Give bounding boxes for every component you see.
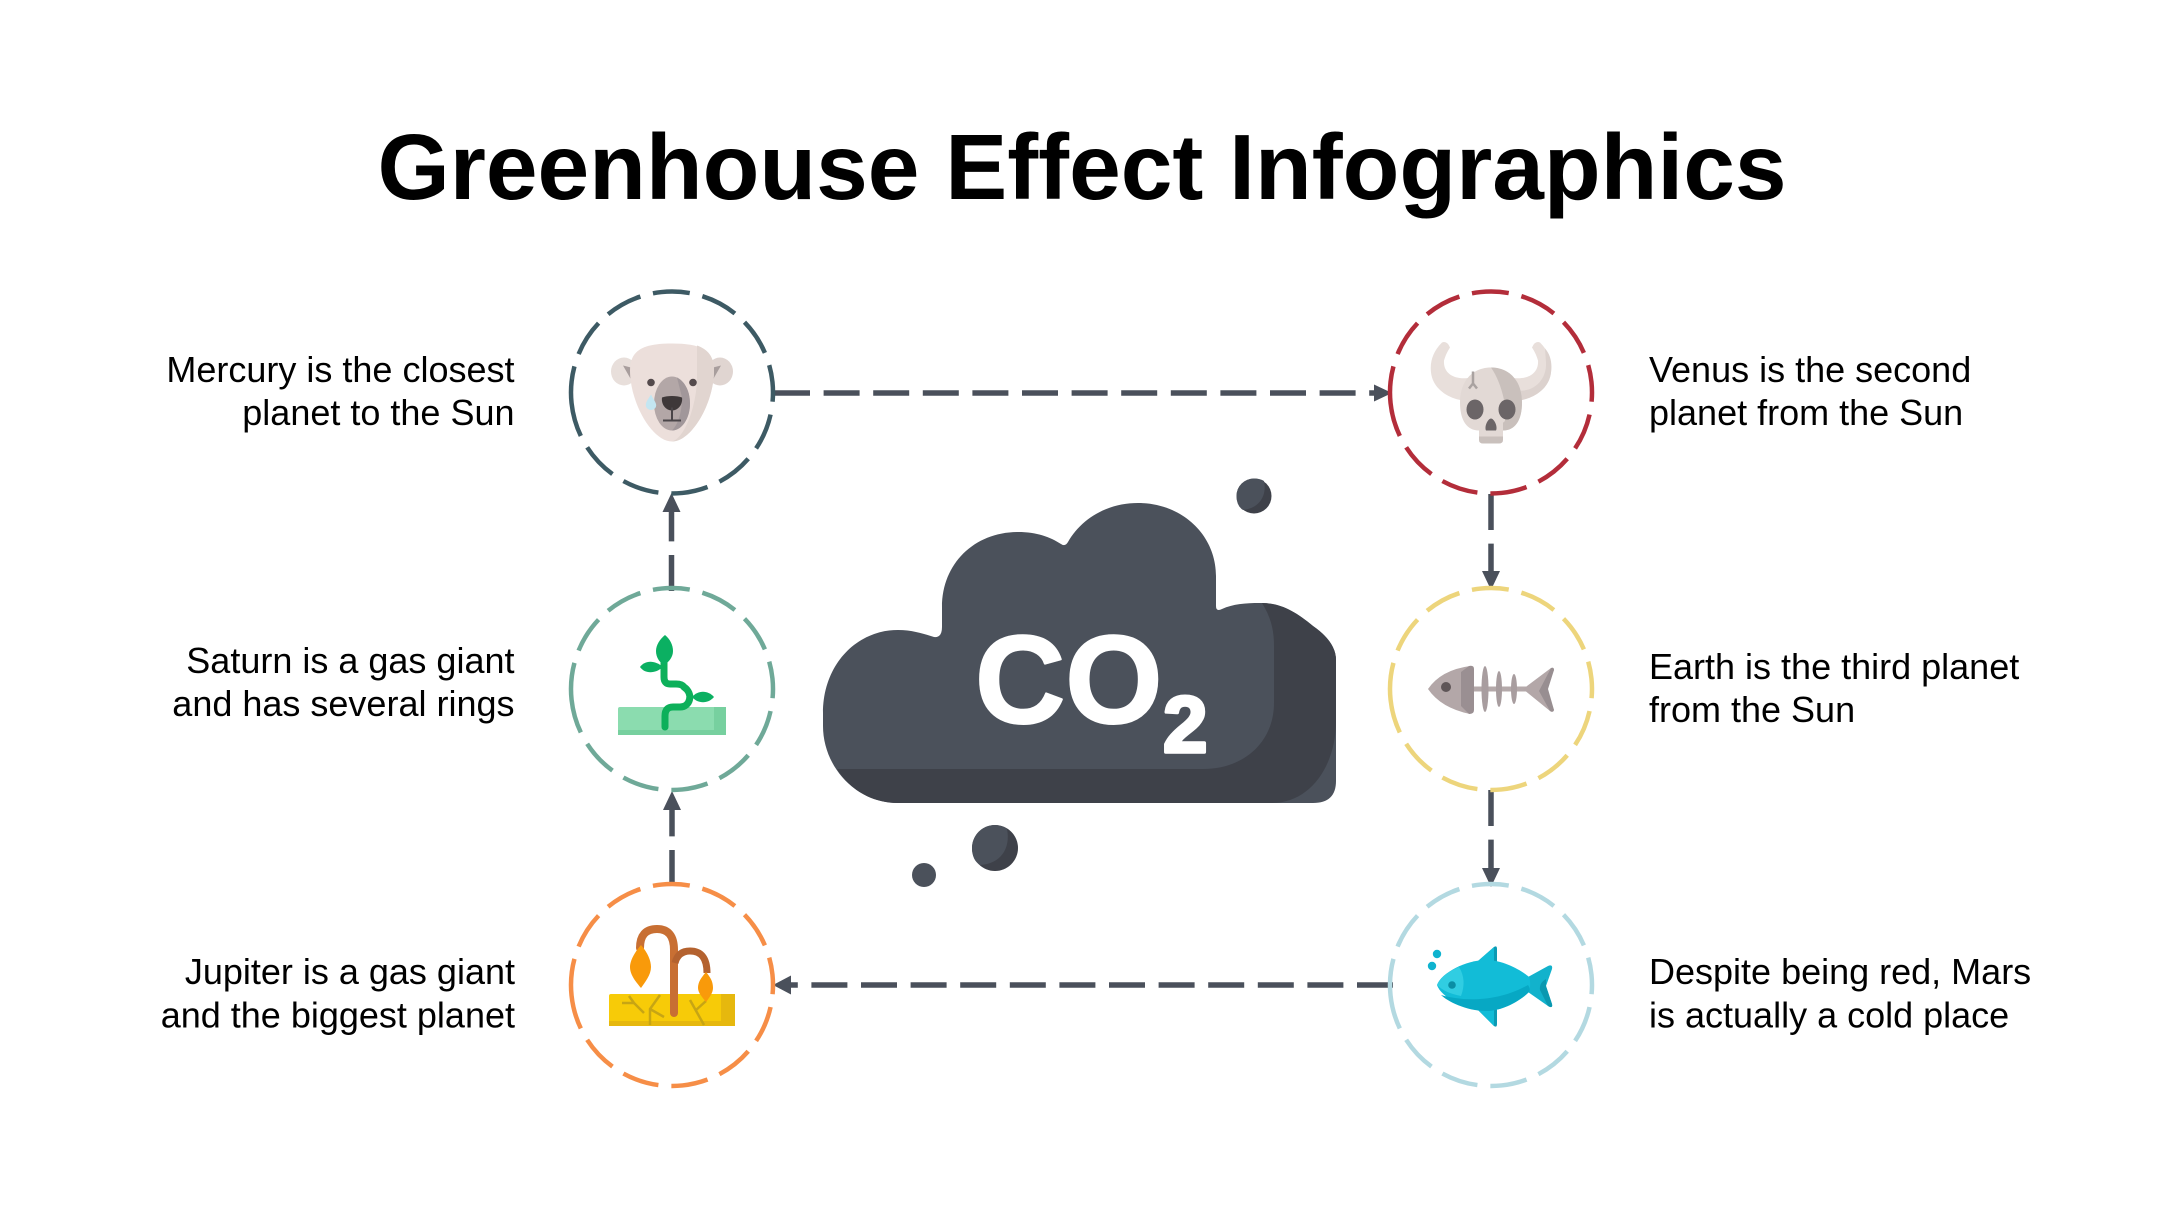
icon: wilted plant on dry soil	[609, 929, 735, 1026]
cloud body	[823, 503, 1336, 803]
text: Jupiter: and the biggest planet	[161, 994, 515, 1036]
title: Greenhouse Effect Infographics	[377, 115, 1787, 219]
text: Saturn: Saturn is a gas giant	[186, 640, 514, 681]
node: sprout	[561, 578, 783, 800]
arrow: dried plant to sprout	[663, 791, 681, 886]
text: Venus: Venus is the second	[1649, 349, 1971, 390]
icon: horned skull	[1431, 342, 1551, 444]
text: Mars: Despite being red, Mars	[1649, 951, 2031, 992]
label: CO2: CO	[975, 611, 1162, 750]
node: fish	[1380, 874, 1602, 1096]
text: Mercury: Mercury is the closest	[166, 349, 514, 390]
text: Venus: planet from the Sun	[1649, 392, 1963, 433]
text: Jupiter: Jupiter is a gas giant	[185, 951, 515, 992]
text: Saturn: and has several rings	[172, 683, 514, 724]
node: fish bone	[1380, 578, 1602, 800]
node: dried plant	[561, 874, 783, 1096]
arrow: fish to dried plant	[773, 976, 1393, 994]
arrow: fish bone to fish	[1482, 790, 1500, 887]
icon: crying polar bear	[611, 344, 733, 442]
smoke puff top right	[1236, 478, 1272, 514]
text: Mars: is actually a cold place	[1649, 994, 2009, 1036]
illustration: CO2 cloud	[823, 478, 1336, 887]
icon: fish skeleton	[1428, 666, 1554, 714]
arrow: sprout to polar bear	[662, 493, 680, 591]
icon: sprout in soil	[618, 635, 726, 735]
smoke puff large	[972, 825, 1018, 871]
arrow: polar bear to skull	[774, 384, 1392, 402]
label: CO2: 2	[1163, 680, 1208, 769]
node: horned skull	[1380, 281, 1602, 504]
icon: blue fish with bubbles	[1428, 946, 1552, 1027]
text: Earth: Earth is the third planet	[1649, 646, 2019, 687]
node: polar bear	[561, 281, 783, 504]
smoke puff small	[912, 863, 936, 887]
cloud shadow	[837, 603, 1336, 803]
text: Earth: from the Sun	[1649, 689, 1855, 730]
arrow: skull to fish bone	[1482, 494, 1500, 590]
text: Mercury: planet to the Sun	[242, 392, 514, 433]
